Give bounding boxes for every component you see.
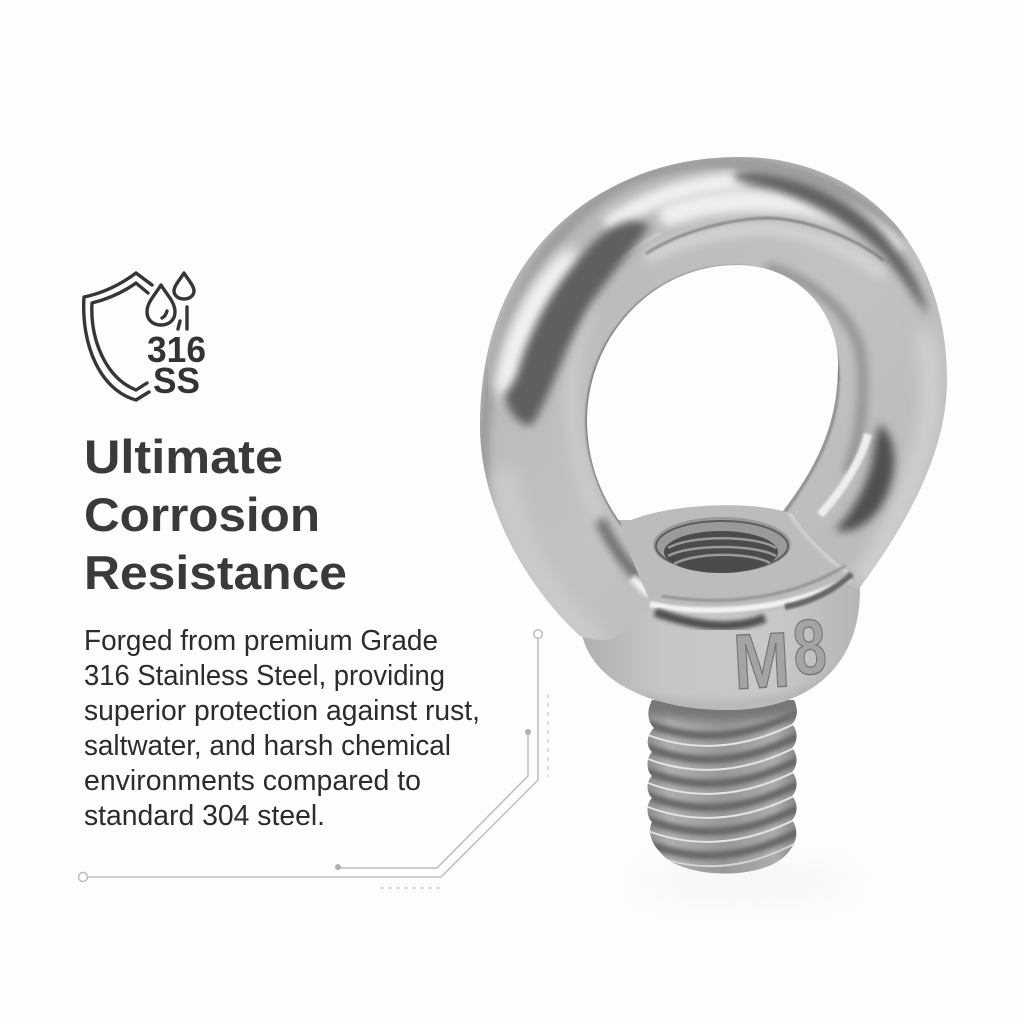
icon: 316 stainless steel shield with water drops — [84, 273, 206, 401]
M8 size marking: 8 — [790, 602, 829, 692]
forged ring — [480, 157, 947, 640]
collar top surface and threaded hole — [620, 505, 848, 598]
body text: superior protection against rust, — [84, 695, 480, 727]
body text: standard 304 steel. — [84, 800, 325, 832]
eye bolt product illustration — [470, 150, 960, 900]
icon label: 316 SS: 316 — [147, 329, 206, 370]
heading: Ultimate — [84, 430, 283, 483]
ground shadow — [635, 864, 855, 900]
dark reflection band, left — [504, 221, 650, 425]
body text: Forged from premium Grade — [84, 625, 438, 657]
reflections on left leg — [600, 520, 642, 580]
heading — [84, 430, 347, 599]
body text: environments compared to — [84, 765, 421, 797]
dark reflection patch, lower right — [835, 424, 894, 531]
collar — [575, 515, 865, 715]
M8 size marking: M — [731, 615, 792, 706]
heading: Corrosion — [84, 488, 320, 541]
icon label: 316 SS — [147, 329, 206, 401]
body text — [84, 625, 480, 832]
icon label: 316 SS: SS — [153, 360, 200, 401]
collar rim reflections — [650, 566, 852, 626]
circuit callout lines — [78, 630, 548, 888]
dark reflection band, top right — [735, 172, 928, 315]
heading: Resistance — [84, 546, 347, 599]
body text: saltwater, and harsh chemical — [84, 730, 451, 762]
M8 size marking — [731, 602, 829, 706]
threaded shank — [648, 700, 797, 874]
body text: 316 Stainless Steel, providing — [84, 660, 445, 692]
